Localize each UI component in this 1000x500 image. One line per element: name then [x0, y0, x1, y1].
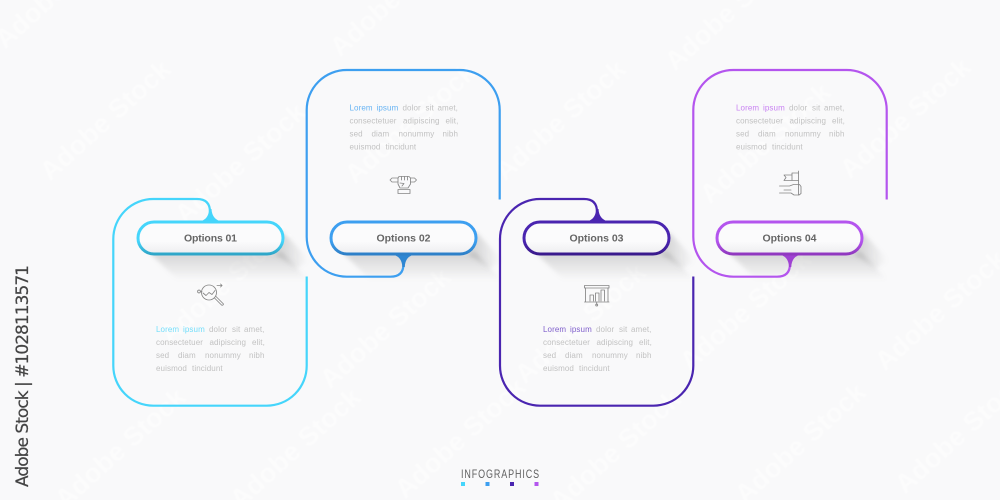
outline 04	[693, 70, 887, 277]
text block 01: tincidunt	[192, 364, 223, 373]
text block 04: elit,	[832, 116, 845, 126]
text block 04: sit	[812, 104, 821, 112]
pill 03	[524, 222, 669, 254]
text block 04: tincidunt	[772, 142, 803, 152]
pill 02	[331, 222, 476, 254]
pill 04	[717, 222, 862, 254]
text block 02: nibh	[442, 130, 458, 138]
legend squares	[461, 482, 538, 486]
text block 01: ipsum	[183, 325, 205, 334]
watermark pattern: Adobe Stock	[169, 96, 312, 229]
text block 01: consectetuer	[156, 338, 203, 347]
watermark pattern: Adobe Stock	[339, 56, 482, 189]
text block 02: consectetuer	[350, 116, 397, 126]
text block 04: amet,	[824, 104, 845, 112]
label 04: Options 04	[762, 232, 817, 244]
text block 03: sed	[543, 351, 556, 360]
text block 03: ipsum	[570, 325, 592, 334]
panel: option 03	[500, 199, 696, 406]
panel: option 02	[307, 70, 503, 280]
text block 02: dolor	[402, 104, 421, 112]
pill shadow 02	[343, 233, 503, 280]
connector 03	[585, 209, 610, 222]
text block 04: dolor	[789, 104, 808, 112]
text block 01: diam	[178, 351, 196, 360]
text block 03: nonummy	[592, 351, 628, 360]
icon: magnifier with trend	[198, 284, 224, 305]
watermark pattern: Adobe Stock	[314, 261, 457, 394]
text block 01: elit,	[252, 338, 265, 347]
title: infographics: INFOGRAPHICS	[461, 469, 540, 481]
text block 03: euismod	[543, 364, 574, 373]
text block 04: euismod	[736, 142, 767, 152]
text block 03	[543, 325, 652, 373]
pill shadow 03	[536, 233, 696, 280]
text block 02: elit,	[446, 116, 458, 126]
text block 02: ipsum	[376, 104, 399, 112]
label 01: Options 01	[184, 232, 237, 244]
text block 04: adipiscing	[790, 116, 826, 126]
watermark pattern: Adobe Stock	[674, 243, 817, 376]
stock id label: Adobe Stock | #1028113571	[13, 265, 33, 487]
text block 03: amet,	[631, 325, 652, 334]
text block 02: sit	[426, 104, 434, 112]
watermark pattern: Adobe Stock	[34, 53, 177, 186]
text block 03: Lorem	[543, 325, 566, 334]
icon: fist with pencil	[390, 176, 416, 194]
text block 01: amet,	[244, 325, 265, 334]
text block 01	[156, 325, 265, 373]
text block 01: adipiscing	[210, 338, 246, 347]
watermark pattern: Adobe Stock	[834, 51, 977, 184]
pill shadow 04	[729, 233, 889, 280]
text block 03: nibh	[636, 351, 652, 360]
panel: option 04	[693, 70, 889, 280]
text block 04: ipsum	[763, 104, 785, 112]
connector 04	[778, 254, 802, 267]
text block 01: nonummy	[205, 351, 241, 360]
connector 02	[391, 254, 416, 267]
text block 03: elit,	[639, 338, 652, 347]
text block 04: sed	[736, 130, 749, 138]
watermark pattern: Adobe Stock	[509, 256, 652, 389]
label 02: Options 02	[376, 232, 431, 244]
text block 02	[350, 104, 458, 152]
text block 03: tincidunt	[579, 364, 610, 373]
text block 01: sit	[232, 325, 241, 334]
text block 03: sit	[619, 325, 628, 334]
watermark pattern: Adobe Stock	[489, 53, 632, 186]
connector 01	[198, 209, 223, 222]
pill 01	[138, 222, 283, 254]
text block 03: dolor	[596, 325, 615, 334]
outline 03	[500, 199, 693, 406]
text block 04: diam	[758, 130, 776, 138]
text block 03: diam	[565, 351, 583, 360]
icon: hand with flag	[780, 171, 801, 195]
text block 01: Lorem	[156, 325, 179, 334]
text block 02: sed	[350, 130, 363, 138]
text block 04	[736, 104, 845, 152]
outline 02	[307, 70, 500, 277]
outline 01	[113, 199, 307, 406]
pill shadow 01	[150, 233, 310, 280]
watermark pattern: Adobe Stock	[154, 216, 297, 349]
text block 03: adipiscing	[596, 338, 633, 347]
text block 02: tincidunt	[386, 142, 417, 152]
text block 03: consectetuer	[543, 338, 590, 347]
icon: presentation board	[584, 286, 609, 306]
text block 04: consectetuer	[736, 116, 783, 126]
text block 02: Lorem	[350, 104, 373, 112]
text block 01: sed	[156, 351, 169, 360]
text block 04: Lorem	[736, 104, 759, 112]
text block 01: nibh	[249, 351, 265, 360]
text block 01: euismod	[156, 364, 187, 373]
text block 04: nonummy	[785, 130, 821, 138]
text block 02: euismod	[350, 142, 380, 152]
label 03: Options 03	[570, 232, 624, 244]
text block 01: dolor	[209, 325, 228, 334]
text block 02: amet,	[438, 104, 458, 112]
text block 02: adipiscing	[403, 116, 440, 126]
text block 04: nibh	[829, 130, 845, 138]
text block 02: diam	[372, 130, 389, 138]
watermark pattern: Adobe Stock	[694, 76, 837, 209]
text block 02: nonummy	[398, 130, 434, 138]
panel: option 01	[113, 199, 310, 406]
